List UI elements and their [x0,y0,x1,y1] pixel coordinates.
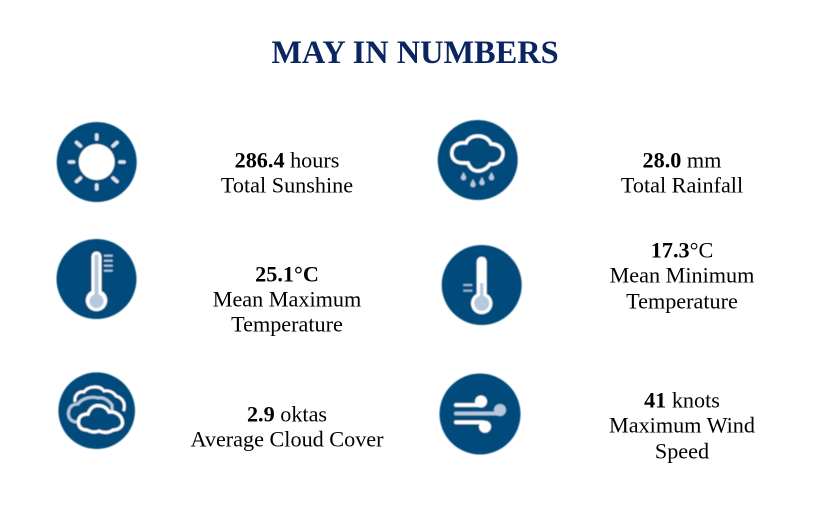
text: average cloud cover [190,402,384,452]
text: maximum wind speed [609,388,755,464]
text: mean maximum temperature: Temperature [231,312,343,337]
text: total sunshine [221,148,353,198]
icon: thermometer maximum [56,239,136,319]
text: mean maximum temperature: Mean Maximum [213,287,361,312]
text: mean maximum temperature [213,262,361,337]
icon: clouds [58,372,135,449]
text: mean minimum temperature: Mean Minimum [610,263,754,288]
text: average cloud cover: 2.9 oktas [247,402,327,427]
icon: sun [57,122,137,202]
icon: wind [440,374,520,454]
text: mean minimum temperature: 17.3°C [651,238,713,263]
text: maximum wind speed: 41 knots [644,388,720,413]
text: total sunshine: 286.4 hours [235,148,339,173]
text: maximum wind speed: Maximum Wind [609,413,755,438]
text: total rainfall [621,148,743,198]
text: total rainfall: 28.0 mm [643,148,721,173]
icon: rain cloud [438,120,518,200]
text: mean minimum temperature: Temperature [626,289,738,314]
icon: thermometer minimum [442,245,522,325]
text: mean minimum temperature [610,238,754,314]
text: maximum wind speed: Speed [655,439,709,464]
text: total sunshine: Total Sunshine [221,173,353,198]
text: average cloud cover: Average Cloud Cover [190,427,384,452]
text: total rainfall: Total Rainfall [621,173,743,198]
title: MAY IN NUMBERS [271,35,559,71]
text: mean maximum temperature: 25.1°C [255,262,319,287]
